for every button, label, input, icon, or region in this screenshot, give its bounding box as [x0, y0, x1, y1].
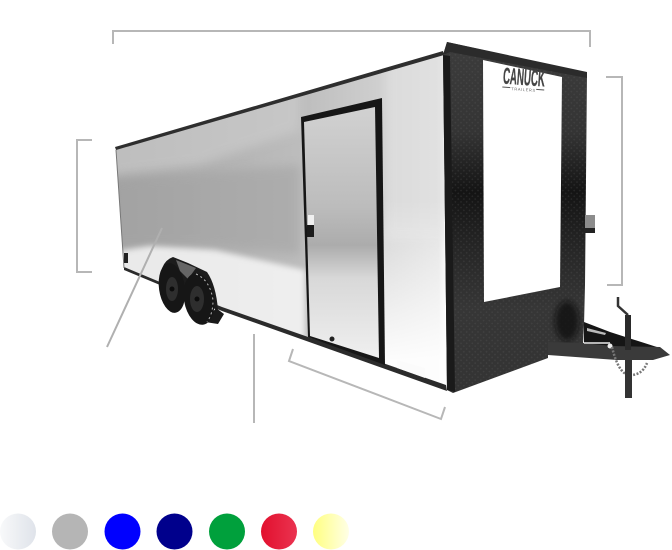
door bottom latch [330, 336, 334, 342]
bottom rail [124, 267, 447, 391]
bracket: trailer length [113, 31, 590, 47]
front tyre [180, 271, 218, 327]
pointer: side wall line [107, 228, 162, 347]
rear tyre [156, 261, 188, 315]
side mounted box [585, 215, 595, 233]
door latch [308, 215, 314, 225]
data sticker [397, 360, 425, 378]
front black panel: CANUCK [502, 63, 546, 91]
swatch: yellow [313, 514, 349, 550]
trailer [100, 40, 670, 398]
colour swatches [0, 514, 349, 550]
swatch: blue [104, 514, 140, 550]
front black panel [443, 42, 587, 393]
trailer tongue [548, 322, 670, 375]
tyre shadow [205, 308, 224, 324]
shadow on nose [555, 301, 579, 341]
swatch: green [209, 514, 245, 550]
wheels and fender [156, 257, 224, 327]
swatch: silver [52, 514, 88, 550]
swatch: navy [156, 514, 192, 550]
rear edge [116, 150, 124, 268]
pointer: skirt line [253, 334, 255, 423]
coupler ball [608, 344, 612, 348]
bracket: lower side length [289, 349, 445, 419]
side door [301, 98, 385, 365]
swatch: red [261, 514, 297, 550]
marker light [124, 253, 128, 263]
swatch: white [0, 514, 36, 550]
coupler chain [612, 347, 647, 375]
roof rail [115, 51, 444, 150]
front white panel [483, 60, 562, 302]
brand logo: TRAILERS [511, 86, 536, 93]
brand logo [502, 63, 546, 93]
bracket: rear height [77, 140, 92, 272]
bracket: front height [606, 77, 622, 285]
trailer side wall [100, 40, 453, 395]
fender [160, 257, 218, 310]
tongue jack [618, 297, 632, 398]
